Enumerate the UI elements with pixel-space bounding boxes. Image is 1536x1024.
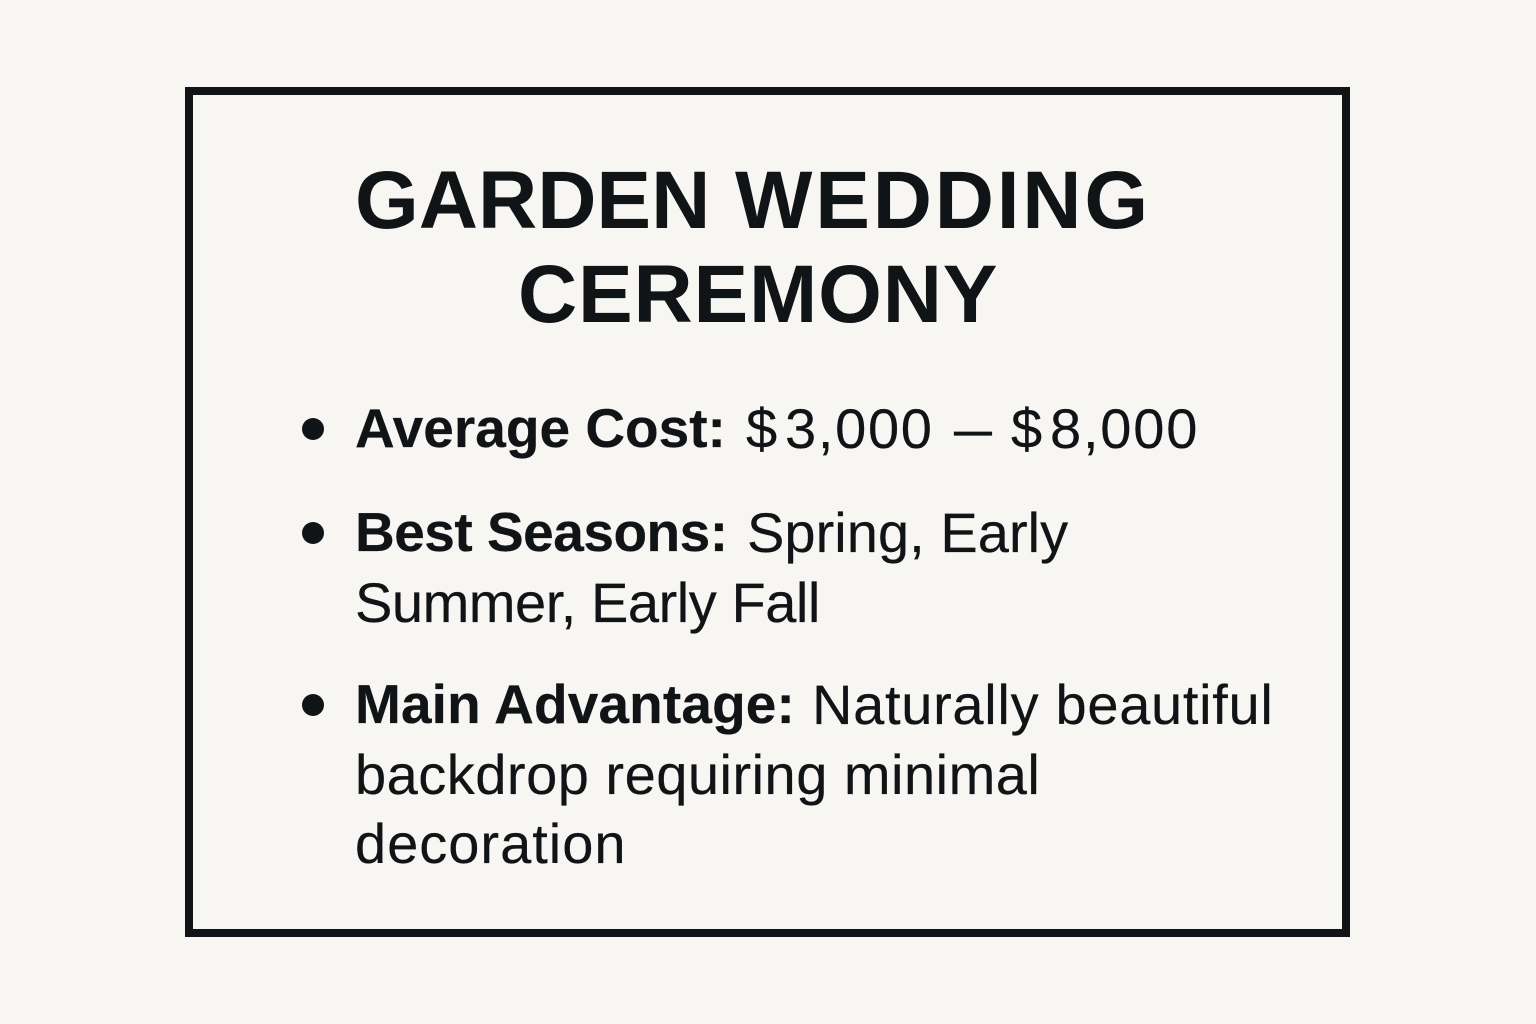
text: $ (746, 397, 777, 460)
panel: card frame (185, 87, 1350, 937)
bullet dot (302, 418, 324, 440)
text: 8,000 (1050, 397, 1199, 460)
bullet: best seasons (302, 501, 1068, 634)
text line 1 (355, 673, 1274, 736)
title line 1: WEDDING (735, 155, 1151, 246)
bullet: average cost (302, 397, 1199, 460)
text: Average Cost: (355, 397, 726, 459)
text line 1: Spring, Early (747, 501, 1068, 564)
title line 1: GARDEN (355, 155, 710, 246)
text: $ (1011, 397, 1042, 460)
text: – (954, 397, 992, 460)
title (355, 155, 1151, 340)
text line 1 (355, 501, 1068, 564)
text line 2: backdrop requiring minimal (355, 743, 1040, 806)
text line 2: Summer, Early Fall (355, 571, 820, 634)
text line 3: decoration (355, 812, 627, 875)
bullet dot (302, 522, 324, 544)
text (355, 397, 1199, 460)
bullet dot (302, 694, 324, 716)
title line 2: CEREMONY (518, 249, 998, 340)
text: 3,000 (785, 397, 934, 460)
title line 1 (355, 155, 1151, 246)
text line 1: Best Seasons: (355, 501, 728, 563)
text line 1: Main Advantage: (355, 673, 795, 735)
text line 1: Naturally beautiful (812, 673, 1274, 736)
bullet: main advantage (302, 673, 1274, 875)
